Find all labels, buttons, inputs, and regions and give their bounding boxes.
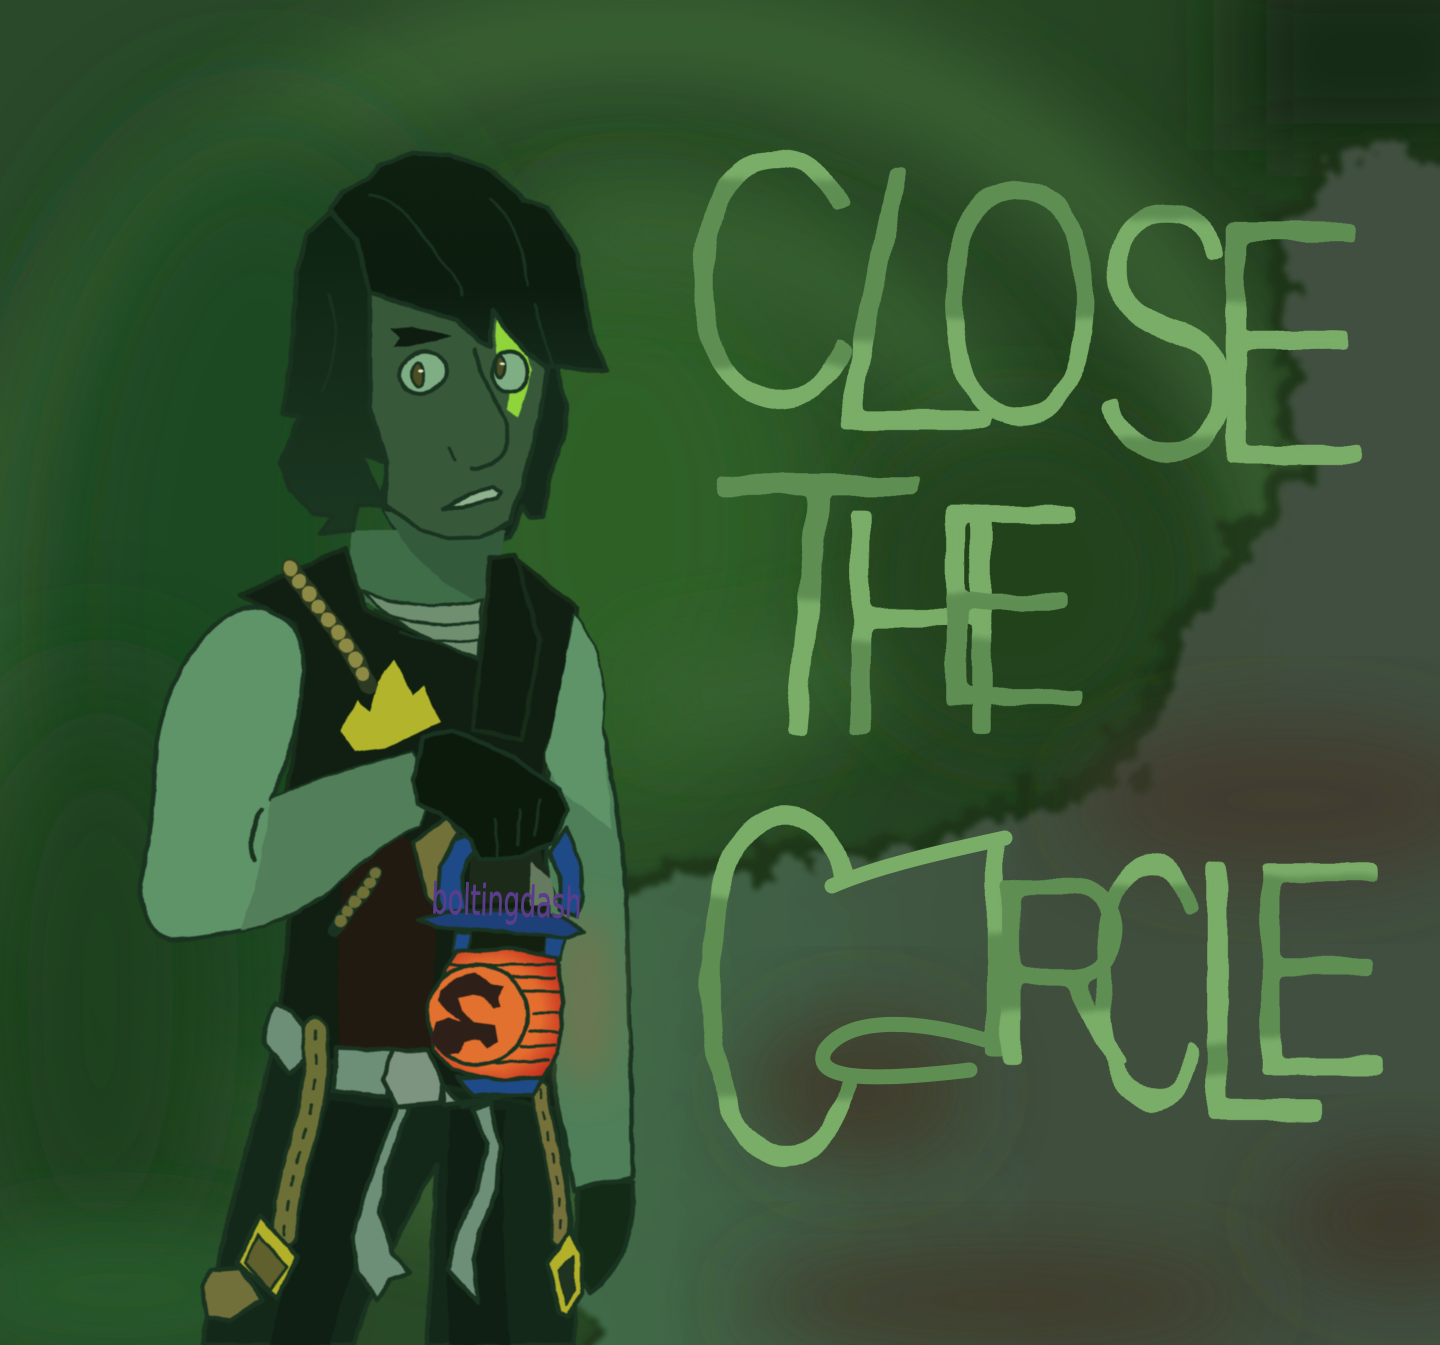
nose <box>472 350 508 468</box>
emblem: gold flame <box>340 660 441 752</box>
character <box>140 153 633 1345</box>
right eye <box>492 351 528 393</box>
word: CLOSE: O <box>933 102 1106 504</box>
word: CLOSE <box>677 66 1375 546</box>
mouth <box>443 487 502 510</box>
sash: belt and tails <box>264 1003 500 1303</box>
side hair <box>280 213 387 533</box>
chain: shoulder <box>290 568 368 685</box>
word: CIRCLE <box>685 683 1393 1287</box>
viewer-right glove <box>575 1181 633 1292</box>
word: THE: E <box>923 438 1095 772</box>
word: CLOSE: S <box>1089 122 1242 541</box>
neck <box>345 530 505 623</box>
brow <box>390 326 452 348</box>
torso vest <box>240 548 578 1110</box>
glove on lantern <box>413 730 568 860</box>
word: CLOSE: C <box>677 66 869 491</box>
viewer-right arm <box>545 615 632 1192</box>
lantern <box>418 827 583 1095</box>
word: CIRCLE: C <box>685 683 873 1287</box>
dragon silhouette <box>430 972 504 1055</box>
viewer-left arm <box>140 608 430 940</box>
word: CIRCLE: I <box>965 771 1026 1129</box>
buckle: left <box>202 1215 298 1320</box>
chain: waist <box>335 872 376 930</box>
lantern body <box>430 948 563 1080</box>
word: THE <box>669 387 1095 822</box>
undershirt collar <box>360 590 482 658</box>
watermark: boltingdash: boltingdash <box>431 874 582 928</box>
rope under glove <box>413 817 458 907</box>
legs <box>203 1040 575 1345</box>
lantern ribs <box>450 965 560 1063</box>
chain: right hanging <box>540 1090 560 1238</box>
word: CIRCLE: R <box>982 816 1141 1127</box>
word: CLOSE: L <box>781 78 1078 519</box>
word: CIRCLE: E <box>1241 794 1393 1146</box>
left eye <box>393 345 453 401</box>
buckle: right <box>547 1232 582 1317</box>
glow stripe <box>495 312 532 418</box>
word: CLOSE: E <box>1203 139 1375 546</box>
front hair <box>330 153 607 370</box>
chest strap <box>472 555 540 740</box>
word: CIRCLE: L <box>1183 772 1330 1208</box>
background: grey-brown fog <box>582 125 1440 1345</box>
lantern handle <box>437 835 477 917</box>
word: THE: H <box>828 431 1014 811</box>
back hair, right side <box>380 350 567 548</box>
chain: left hanging <box>285 1030 316 1235</box>
word: CIRCLE: C <box>1086 771 1209 1191</box>
lantern handle interior <box>470 850 558 905</box>
lantern bottom <box>457 1077 543 1095</box>
flourish on the I of CIRCLE <box>823 838 1005 1077</box>
lantern dragon roundel <box>427 965 527 1065</box>
word: THE: T <box>669 387 946 822</box>
face <box>370 280 547 538</box>
lantern cap <box>418 910 583 938</box>
title: CLOSE THE CIRCLE <box>669 66 1393 1287</box>
